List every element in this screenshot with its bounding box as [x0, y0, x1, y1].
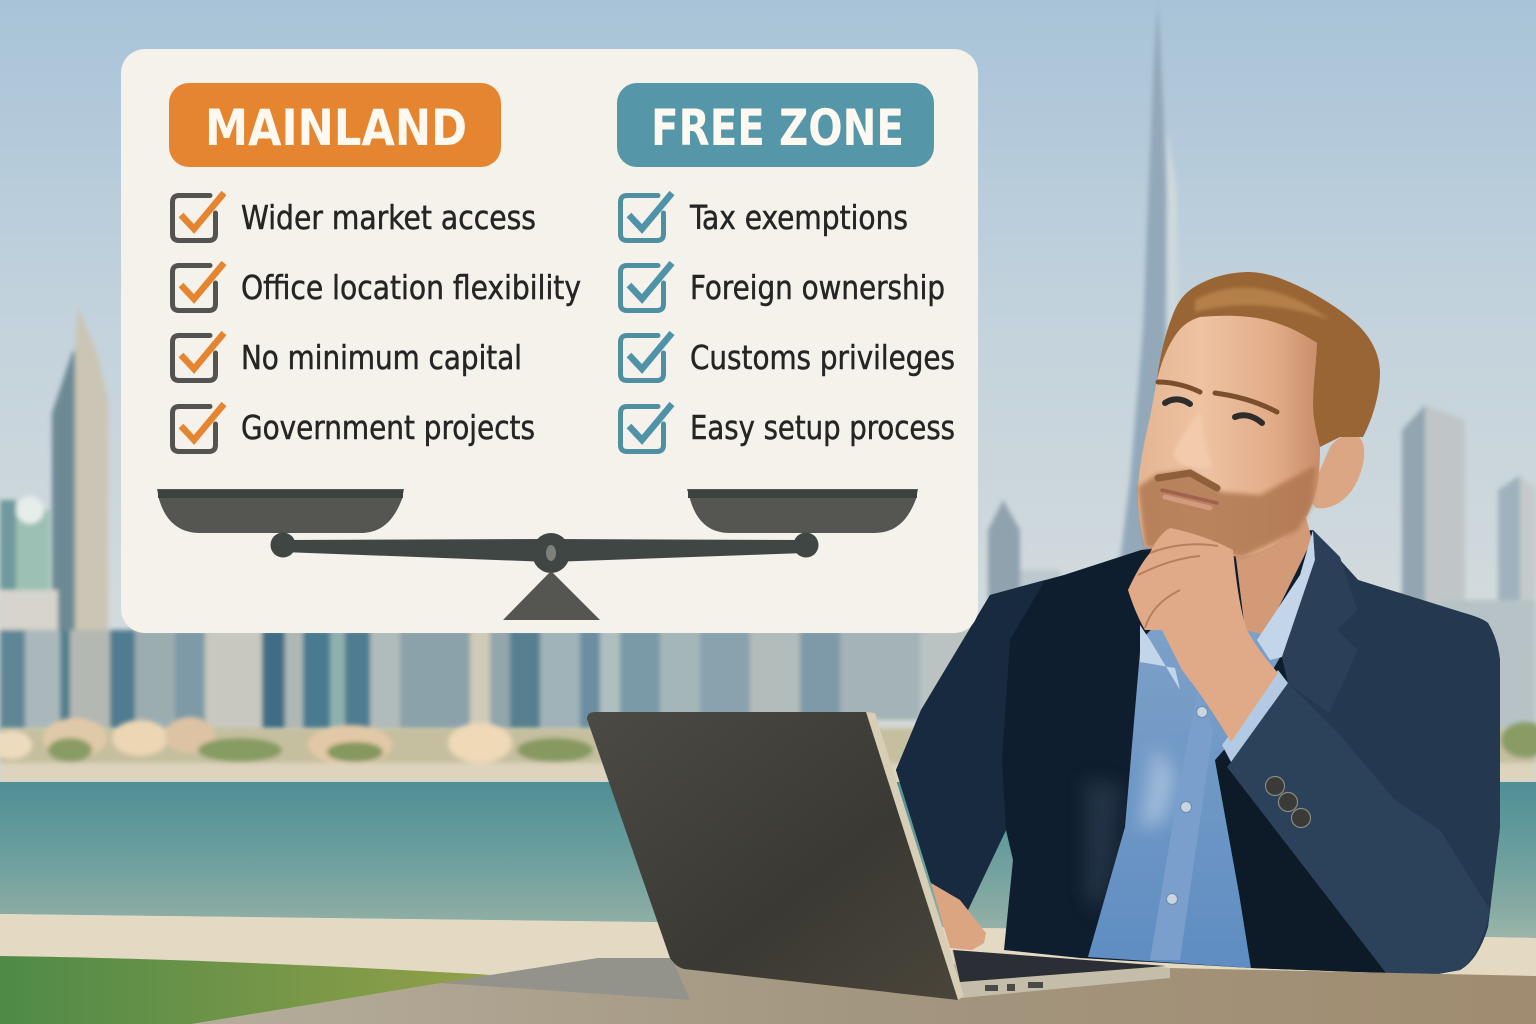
man: hair [1157, 272, 1380, 447]
item: no minimum capital [172, 333, 522, 380]
free zone checklist [620, 193, 955, 452]
item: wider market access [172, 193, 536, 240]
man: hand and wrist [1128, 528, 1278, 742]
icon: balance scale [157, 489, 918, 620]
man: beard [1138, 465, 1316, 557]
item: office location flexibility [172, 263, 581, 310]
laptop: lid [587, 712, 958, 1000]
man: jacket base [896, 530, 1500, 979]
laptop: ports [985, 982, 1043, 991]
background: grass [0, 956, 491, 1024]
man: jacket lapel [1282, 530, 1358, 713]
man: shirt placket [1150, 690, 1213, 960]
right towers [1402, 405, 1425, 640]
mainland checklist [172, 193, 581, 452]
background: shoreline [0, 717, 1536, 783]
laptop [587, 712, 1170, 1000]
man: shirt buttons [1166, 706, 1208, 904]
man: ear [1308, 434, 1364, 508]
table: laptop shadow [440, 958, 690, 1000]
man: shirt cuff [1222, 670, 1288, 762]
panel background [121, 49, 978, 633]
scale: base [503, 571, 600, 620]
man: left hand on laptop [931, 883, 986, 950]
man: shirt highlight [1140, 745, 1175, 830]
skyline band [0, 630, 25, 730]
comparison panel [121, 49, 978, 633]
item: government projects: Government projects [241, 408, 535, 447]
heading: free zone: FREE ZONE [651, 99, 904, 157]
item: tax exemptions: Tax exemptions [689, 198, 908, 237]
item: no minimum capital: No minimum capital [241, 338, 522, 377]
item: office location flexibility: Office location flexibility [241, 268, 581, 307]
item: customs privileges: Customs privileges [690, 338, 955, 377]
man: finger lines [1138, 544, 1218, 628]
background: sky [0, 0, 1536, 760]
man: left arm [896, 580, 1045, 910]
laptop: base [952, 950, 1170, 998]
item: foreign ownership: Foreign ownership [690, 268, 945, 307]
item: customs privileges [620, 333, 955, 380]
scale: left pan [157, 489, 404, 533]
man: shirt collar [1140, 530, 1315, 690]
man: neck [1235, 510, 1312, 635]
background: city skyline [0, 0, 1536, 740]
left tower [52, 345, 80, 725]
man: shirt [1088, 600, 1290, 968]
man: jacket right front [1215, 760, 1386, 973]
heading: mainland: MAINLAND [205, 99, 467, 157]
laptop: lid edge [866, 712, 964, 1000]
item: foreign ownership [620, 263, 945, 310]
item: easy setup process [620, 404, 955, 452]
man: hair highlight [1195, 287, 1330, 320]
item: government projects [172, 404, 535, 452]
scale: beam [283, 539, 805, 562]
item: tax exemptions [620, 193, 908, 240]
background: sand path [0, 914, 1536, 1024]
item: easy setup process: Easy setup process [690, 408, 955, 447]
background: water [0, 782, 1536, 938]
item: wider market access: Wider market access [241, 198, 536, 237]
man [896, 272, 1500, 979]
scale: right pan [687, 489, 918, 533]
man: jacket cuff buttons [1266, 776, 1310, 828]
Burj tower [1120, 0, 1170, 560]
man: facial features [1158, 382, 1277, 508]
table [192, 958, 1536, 1024]
man: jacket front highlight [1085, 780, 1122, 915]
laptop: keyboard [953, 950, 1166, 982]
heading: mainland [169, 83, 501, 167]
heading: free zone [617, 83, 934, 167]
man: head [1138, 316, 1320, 557]
man: sleeve [1227, 683, 1490, 979]
man: nose [1173, 410, 1212, 468]
man: jacket right body [1231, 530, 1500, 979]
